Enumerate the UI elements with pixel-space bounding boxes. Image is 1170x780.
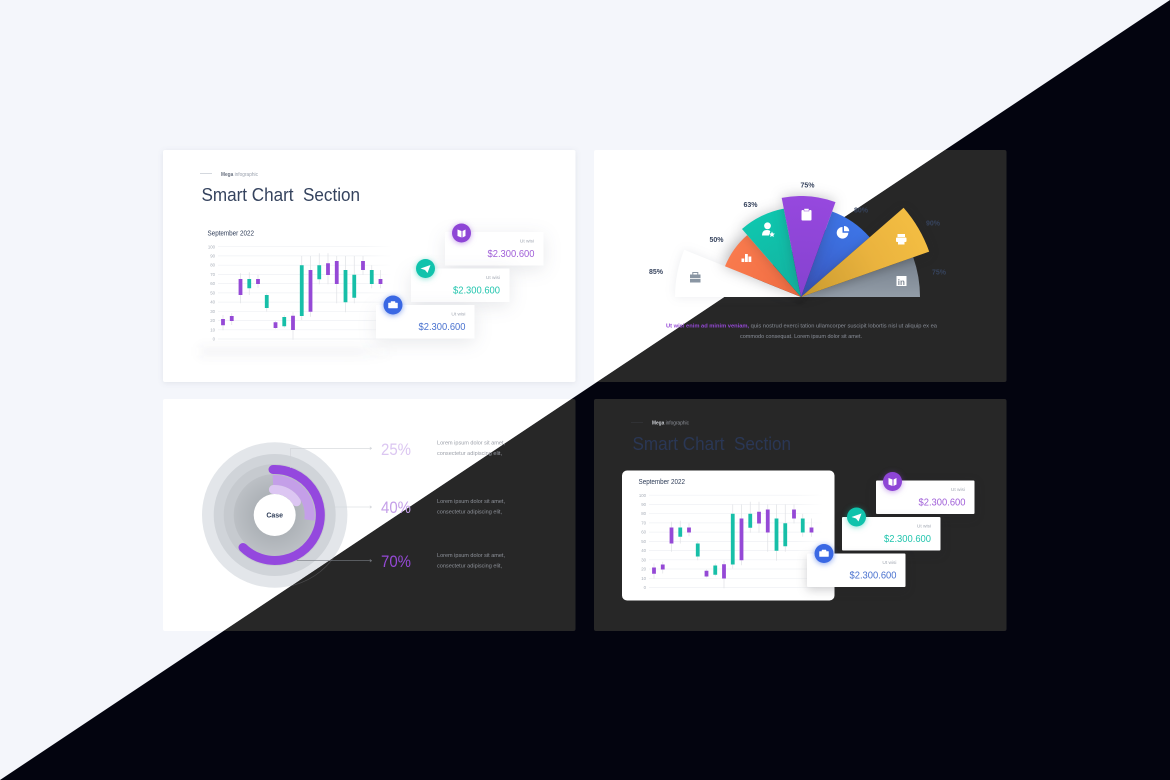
icon: briefcase (690, 272, 700, 282)
candlestick chart: 0 (213, 336, 216, 342)
candlestick chart: 60 (210, 281, 216, 286)
candlestick chart: 10 (210, 327, 216, 332)
legend: 25% (381, 440, 506, 459)
panel: smart chart dark (594, 399, 1006, 631)
wedge: grey 75% (801, 257, 920, 297)
wedge: yellow 90% (801, 208, 929, 297)
card: blue value dark: Ut wisi (882, 560, 896, 566)
candlestick chart: 70 (210, 272, 216, 277)
card: blue value: $2.300.600 (418, 321, 466, 333)
header label dark: Mega infographic (652, 420, 689, 426)
card: teal value (411, 259, 510, 302)
candlestick chart: 90 (210, 254, 216, 258)
candlestick chart dark (638, 479, 823, 590)
labels: percentages: 50% (709, 237, 724, 244)
candlestick chart dark: 10 (641, 576, 647, 581)
labels: percentages: 75% (932, 270, 947, 276)
labels: percentages: 63% (743, 202, 758, 209)
card: purple value: Ut wisi (520, 238, 534, 244)
candlestick chart dark: 70 (641, 520, 647, 525)
card: blue value dark (807, 544, 906, 587)
panel: fan chart split background (594, 150, 1006, 382)
icon: linkedin: in (898, 278, 905, 287)
card: purple value: $2.300.600 (488, 248, 535, 260)
card: blue value: Ut wisi (451, 312, 466, 318)
card: teal value dark (842, 508, 940, 550)
header line and label (200, 172, 258, 178)
leader lines (291, 447, 372, 562)
centre label (254, 494, 296, 536)
candlestick chart dark: 40 (641, 548, 647, 553)
legend: 40% (381, 499, 506, 517)
legend: 40%: Lorem ipsum dolor sit amet, (437, 499, 506, 505)
icon: clipboard (802, 208, 812, 220)
chart shadow (200, 347, 395, 356)
candlestick chart dark: September 2022 (638, 479, 685, 486)
candlestick chart dark: 90 (641, 502, 647, 507)
labels: percentages: 75% (800, 182, 815, 190)
candlestick chart dark: 80 (641, 511, 647, 516)
card: purple value dark (876, 472, 974, 514)
title: Smart Chart Section (202, 184, 360, 205)
card: purple value (445, 224, 544, 266)
legend: 40%: consectetur adipiscing elit, (437, 510, 503, 516)
candlestick chart: 20 (210, 318, 216, 323)
legend: 70%: consectetur adipiscing elit, (437, 564, 503, 570)
candlestick chart dark: 100 (639, 493, 647, 498)
card: purple value dark: Ut wisi (951, 487, 965, 493)
candlestick chart dark: 50 (641, 539, 647, 544)
candlestick chart: September 2022 (208, 230, 254, 238)
icon: bar chart (742, 254, 751, 262)
text block: fan description: Ut wisi enim ad minim veniam, quis nostrud exerci tation ullamcorper suscipit lobortis nisl ut aliquip ex ea (666, 324, 937, 330)
panel: ring chart split background (163, 399, 576, 631)
candlestick chart: 80 (210, 263, 216, 268)
labels: percentages: 90% (926, 220, 941, 228)
wedge: blue 80% (801, 212, 870, 297)
wedge: orange 50% (725, 235, 801, 297)
arc: 25% light purple (273, 489, 296, 502)
candlestick chart dark: 60 (641, 530, 647, 535)
wedge: white 85% (675, 250, 801, 297)
ring chart (202, 442, 347, 588)
labels: percentages (649, 182, 947, 276)
header label dark (631, 420, 689, 426)
candlestick chart: 50 (210, 290, 216, 295)
header line and label: Mega infographic (221, 172, 258, 178)
card: purple value dark: $2.300.600 (918, 496, 966, 508)
card: blue value dark: $2.300.600 (850, 570, 897, 582)
wedge: purple 75% (782, 196, 836, 297)
card: blue value (376, 296, 474, 338)
centre label: Case (266, 512, 283, 520)
candlestick chart dark: 30 (641, 557, 647, 562)
icon: pie chart (837, 226, 849, 239)
panel: smart chart light (163, 150, 576, 382)
candlestick chart: 100 (208, 244, 216, 249)
candlestick chart dark: 0 (644, 585, 647, 590)
legend: 25%: Lorem ipsum dolor sit amet, (437, 440, 506, 446)
text block: fan description: commodo consequat. Lorem ipsum dolor sit amet. (740, 334, 862, 340)
candlestick chart: 30 (210, 309, 216, 314)
icon: person with star (762, 222, 775, 237)
card: teal value dark: Ut wisi (917, 524, 931, 530)
arc: 40% mid purple (273, 480, 310, 520)
legend: 70%: Lorem ipsum dolor sit amet, (437, 553, 506, 559)
legend: 70% (381, 553, 506, 571)
arc: 70% dark purple (243, 469, 320, 560)
fan chart (649, 182, 947, 297)
labels: percentages: 85% (649, 269, 664, 276)
legend: 40%: 40% (381, 499, 411, 517)
legend: 70%: 70% (381, 553, 411, 571)
card: teal value: $2.300.600 (453, 284, 500, 296)
candlestick chart dark: 20 (641, 566, 647, 572)
concentric grey rings (202, 442, 347, 588)
icon: printer (896, 234, 906, 244)
legend: 25%: 25% (381, 441, 411, 459)
card: teal value: Ut wisi (486, 275, 500, 281)
icon: linkedin (896, 276, 906, 287)
wedge: teal 63% (742, 209, 801, 297)
chart box (622, 470, 834, 600)
candlestick chart (208, 230, 392, 342)
legend: 25%: consectetur adipiscing elit, (437, 451, 503, 457)
card: teal value dark: $2.300.600 (884, 533, 931, 545)
text block: fan description (666, 324, 937, 340)
candlestick chart: 40 (210, 300, 216, 305)
labels: percentages: 80% (854, 208, 869, 214)
title dark: Smart Chart Section (632, 433, 791, 454)
